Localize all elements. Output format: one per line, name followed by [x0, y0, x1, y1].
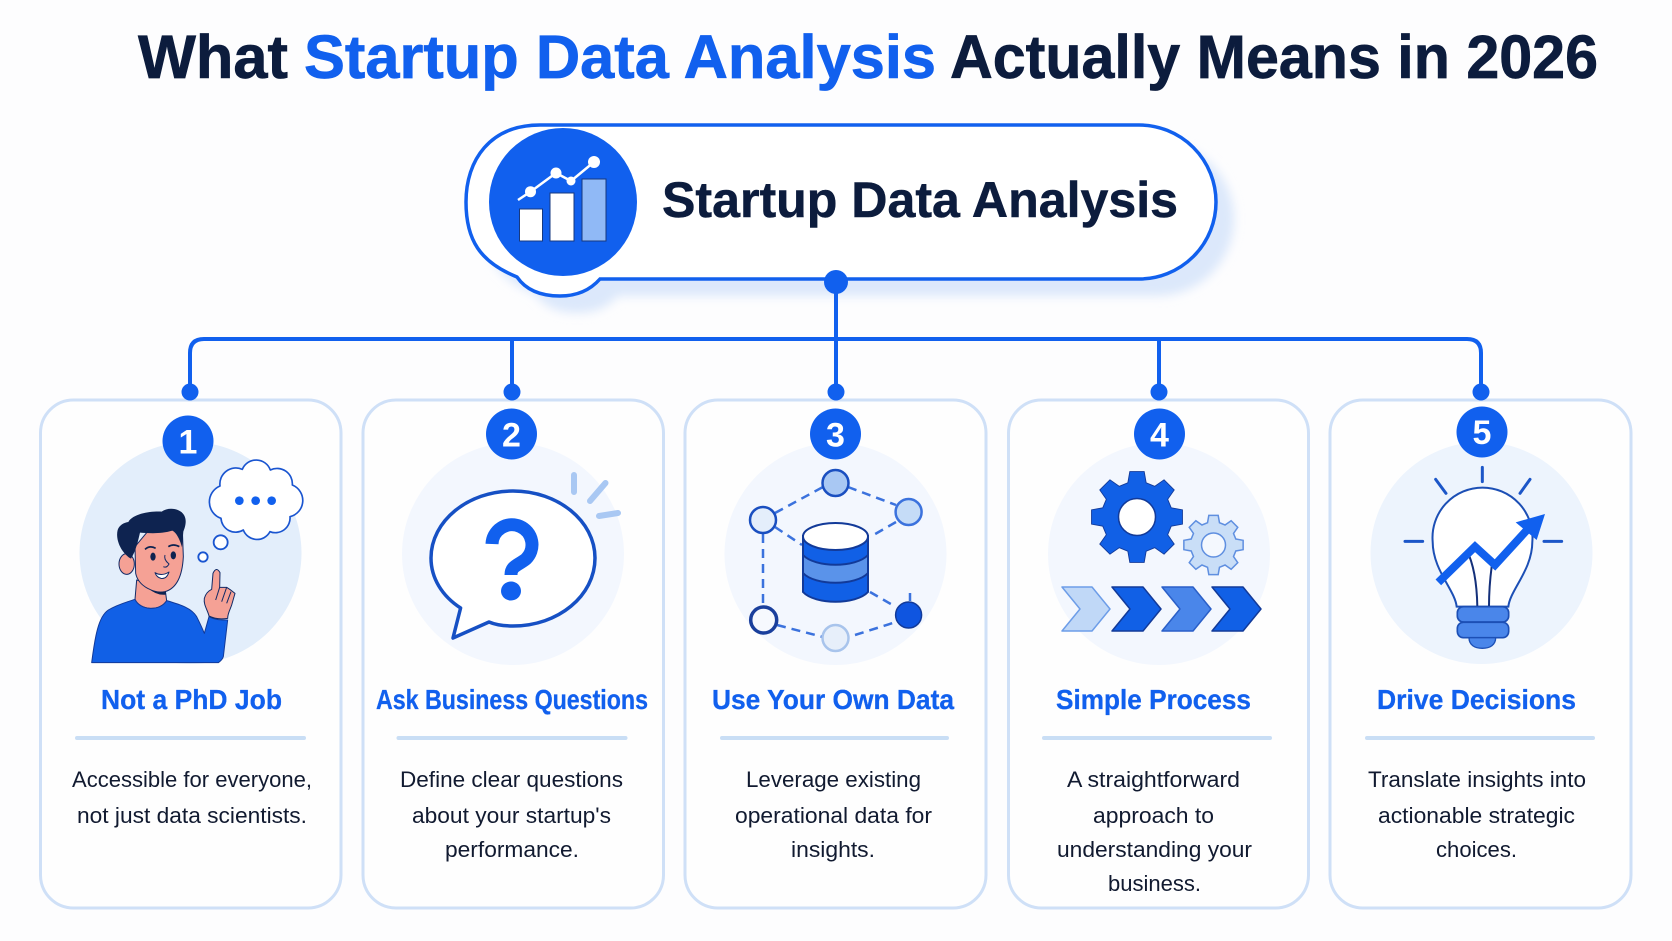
heading: Not a PhD Job	[101, 684, 282, 715]
number badge 1: 1	[179, 424, 197, 462]
heading: Use Your Own Data	[712, 684, 954, 715]
title: Actually Means in 2026	[950, 23, 1598, 91]
panel: card 1 Not a PhD Job	[40, 400, 341, 908]
description	[1368, 767, 1586, 862]
number badge 4: 4	[1150, 416, 1169, 454]
description: A straightforward	[1067, 767, 1240, 792]
description: approach to	[1093, 803, 1214, 828]
title	[138, 23, 1598, 91]
description: insights.	[791, 837, 875, 862]
illustration: gears and chevrons	[1048, 443, 1270, 665]
illustration: light bulb with growth arrow	[1370, 442, 1592, 664]
description: Translate insights into	[1368, 767, 1586, 792]
description: not just data scientists.	[77, 803, 307, 828]
panel: card 3 Use Your Own Data	[685, 400, 986, 908]
divider	[75, 736, 306, 740]
divider	[1365, 736, 1595, 740]
description: business.	[1108, 871, 1201, 896]
number badge 3	[810, 408, 861, 460]
divider	[720, 736, 949, 740]
description	[735, 767, 933, 862]
illustration: database network	[724, 443, 946, 665]
hub label: Startup Data Analysis	[662, 172, 1178, 228]
description: Leverage existing	[746, 767, 921, 792]
divider	[1042, 736, 1272, 740]
panel: card 5 Drive Decisions	[1330, 400, 1631, 908]
number badge 5: 5	[1473, 414, 1491, 452]
number badge 1	[162, 416, 214, 466]
description: Accessible for everyone,	[72, 767, 312, 792]
heading: Ask Business Questions	[376, 684, 648, 715]
heading: Drive Decisions	[1377, 684, 1576, 715]
description	[400, 767, 623, 862]
description: choices.	[1436, 837, 1517, 862]
icon: bar chart with trend line	[518, 156, 606, 241]
heading: Simple Process	[1056, 684, 1251, 715]
description: Define clear questions	[400, 767, 623, 792]
panel: card 4 Simple Process	[1008, 400, 1308, 908]
number badge 5	[1456, 406, 1508, 458]
description: about your startup's	[412, 803, 611, 828]
description	[72, 767, 312, 828]
description: performance.	[445, 837, 579, 862]
hub node	[824, 270, 848, 294]
divider	[396, 736, 628, 740]
central hub: Startup Data Analysis	[466, 125, 1234, 313]
description: understanding your	[1057, 837, 1253, 862]
illustration: question bubble	[402, 443, 624, 665]
number badge 2: 2	[502, 416, 521, 454]
number badge 4	[1134, 408, 1185, 460]
panel: card 2 Ask Business Questions	[363, 400, 664, 908]
description: operational data for	[735, 803, 933, 828]
title: What	[138, 23, 288, 91]
number badge 2	[486, 408, 537, 460]
connector tree	[182, 282, 1490, 400]
description	[1057, 767, 1253, 896]
description: actionable strategic	[1378, 803, 1575, 828]
title: Startup Data Analysis	[304, 23, 936, 91]
illustration: person thinking	[80, 442, 303, 664]
number badge 3: 3	[826, 416, 845, 454]
